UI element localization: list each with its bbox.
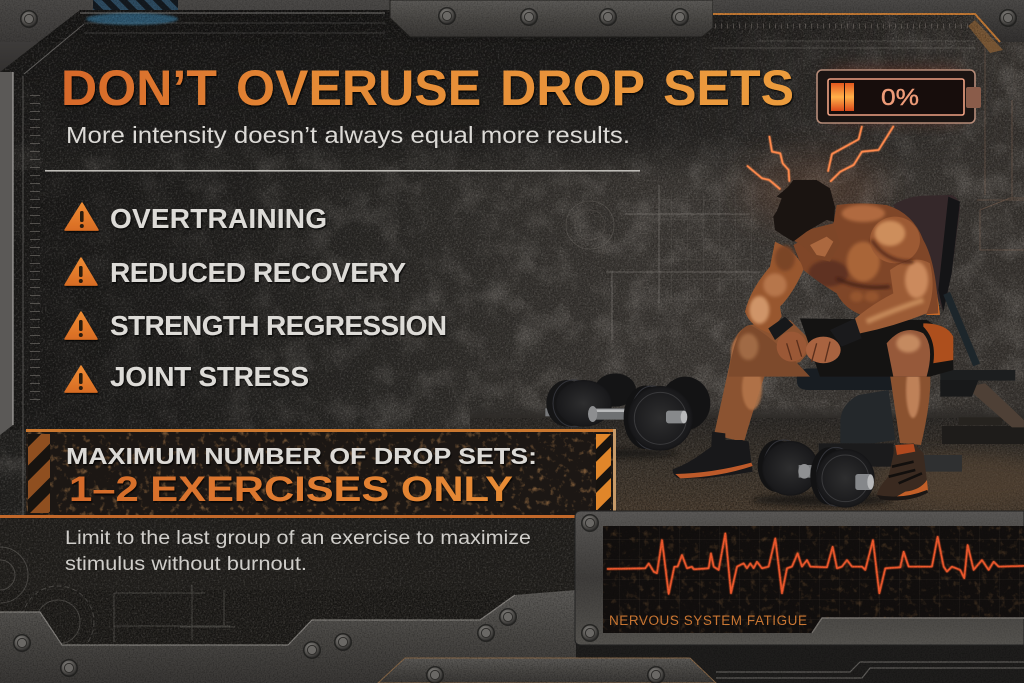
item: reduced recovery: REDUCED RECOVERY <box>110 257 406 288</box>
callout value: 1–2 EXERCISES ONLY <box>69 470 513 509</box>
torso and arms <box>728 180 953 377</box>
body text <box>65 528 531 575</box>
monitor: nervous system fatigue <box>575 511 1024 645</box>
item: strength regression: STRENGTH REGRESSION <box>110 310 447 341</box>
monitor label: NERVOUS SYSTEM FATIGUE <box>609 613 808 628</box>
battery indicator: 0% <box>881 84 919 110</box>
body text: stimulus without burnout. <box>65 554 307 575</box>
body text: Limit to the last group of an exercise to maximize <box>65 528 531 549</box>
item: overtraining: OVERTRAINING <box>110 203 327 234</box>
callout label: MAXIMUM NUMBER OF DROP SETS: <box>66 443 537 469</box>
lightning bolts <box>747 126 894 189</box>
chair back <box>893 195 977 365</box>
dumbbell: front <box>752 440 892 508</box>
battery indicator <box>817 70 981 123</box>
subtitle: More intensity doesn’t always equal more results. <box>66 122 630 148</box>
item: joint stress: JOINT STRESS <box>110 361 309 392</box>
background wall <box>0 10 1024 515</box>
lower left dark panel <box>0 517 576 658</box>
shoes <box>673 432 928 500</box>
title: DON’T OVERUSE DROP SETS <box>61 60 794 116</box>
divider <box>45 170 640 172</box>
bench <box>797 368 1024 472</box>
metal frame bottom <box>0 590 1024 683</box>
ecg trace <box>607 533 1024 594</box>
dumbbell: left pair <box>545 373 710 458</box>
warning list <box>65 203 447 392</box>
blueprint grid decoration <box>566 26 1024 340</box>
legs <box>714 320 930 445</box>
callout panel <box>0 429 616 518</box>
athlete figure <box>673 155 977 500</box>
floor <box>470 405 1024 515</box>
